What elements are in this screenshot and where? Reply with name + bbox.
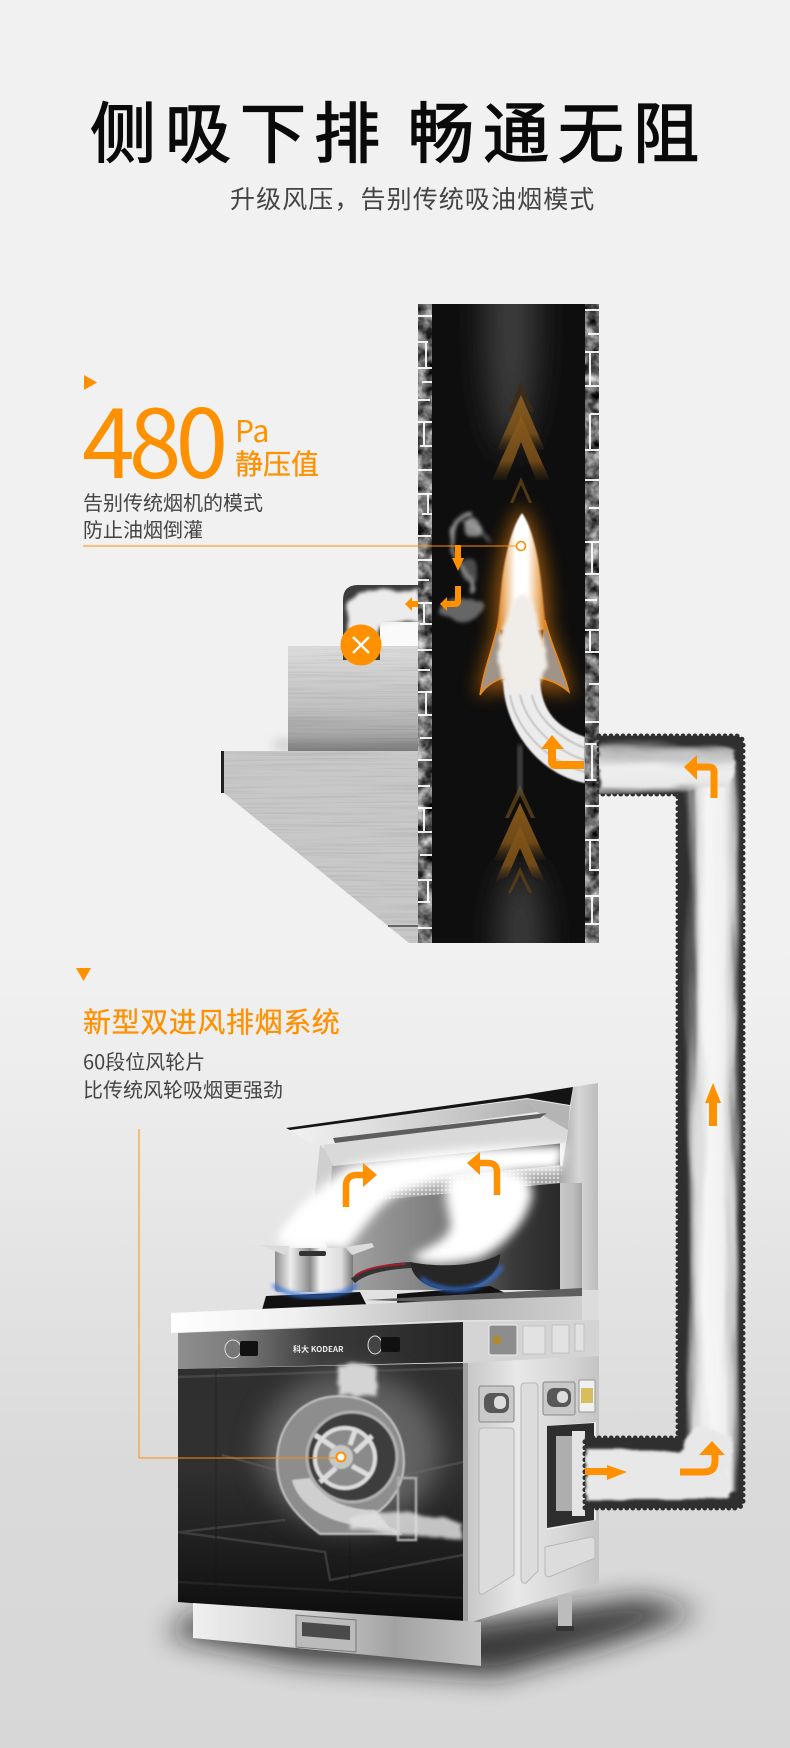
upper hood panel: [290, 1099, 537, 1143]
snail bright band: [292, 1478, 390, 1528]
counter hob plate: [366, 1288, 582, 1303]
side frame: [560, 1083, 598, 1290]
side handle recess left: [479, 1386, 514, 1422]
knob right: [368, 1336, 400, 1354]
label static pressure: 静压值: [235, 443, 319, 483]
fan spokes: [315, 1428, 372, 1482]
arrow: lower duct turn: [680, 1441, 725, 1472]
control panel: [178, 1322, 463, 1369]
small duct with blocked flow: [343, 585, 420, 660]
flame under pot: [273, 1285, 357, 1296]
left pillar: [310, 1145, 333, 1243]
exhaust duct: [585, 736, 745, 1508]
fan inner ring: [315, 1428, 375, 1488]
upper chevrons: [492, 382, 550, 503]
glass soft fan glow: [260, 1372, 440, 1528]
arrow: vertical duct up: [705, 1083, 721, 1126]
cooktop plume smoke: [276, 1145, 565, 1263]
wok handle accent: [355, 1264, 405, 1276]
chimney shaft: [432, 304, 585, 943]
lower hood panel: [323, 1115, 568, 1166]
right brick wall: [585, 304, 599, 943]
hood upper box: [288, 646, 418, 751]
duct box: [398, 1478, 416, 1540]
hood back wall: [325, 1140, 560, 1290]
description line 1: 60段位风轮片: [83, 1046, 205, 1075]
wok handle: [353, 1265, 411, 1281]
duct smoke: [347, 589, 420, 650]
oven smoke out: [350, 1511, 463, 1540]
duct outline: [585, 736, 743, 1508]
door edge strip: [463, 1363, 468, 1625]
pot handles: [260, 1243, 374, 1255]
left grate: [262, 1292, 367, 1310]
cabinet base: [193, 1603, 481, 1666]
duct outer: [343, 585, 418, 660]
hood front edge: [221, 751, 224, 793]
brand text: 科大 KODEAR: [293, 1344, 344, 1355]
icon: down triangle marker: [76, 968, 91, 981]
white gap beneath duct: [380, 622, 418, 646]
subtitle: 升级风压，告别传统吸油烟模式: [230, 180, 595, 216]
glow layers: [485, 190, 543, 1005]
range hood exterior: [221, 646, 418, 943]
big number 480: 480: [82, 369, 224, 506]
lower chevrons: [494, 785, 546, 893]
arrow: smoke down: [452, 545, 464, 571]
rocket glow: [476, 505, 574, 695]
glass door: [178, 1363, 463, 1625]
right grate: [397, 1286, 512, 1304]
counter top: [171, 1296, 582, 1333]
description line 2: 比传统风轮吸烟更强劲: [83, 1074, 283, 1103]
side opening: [547, 1422, 596, 1530]
fan assembly: [277, 1396, 416, 1540]
duct smoke clip group: [586, 742, 745, 1500]
description line 2: 防止油烟倒灌: [83, 514, 203, 543]
hood assembly: [286, 1083, 598, 1290]
arrow: chimney entry: [541, 735, 584, 765]
air slot: [333, 1113, 547, 1143]
arrows: [346, 545, 725, 1480]
faint trail below rocket: [518, 745, 522, 795]
lower frame panel: [560, 1183, 582, 1290]
fan wheel: [307, 1412, 397, 1502]
pot body: [275, 1248, 353, 1292]
right wedge: [527, 1099, 570, 1130]
arrow: hood left burner: [346, 1163, 377, 1207]
leg: [556, 1595, 574, 1631]
side panels: [479, 1383, 595, 1594]
cabinet side panel: [463, 1356, 599, 1625]
panel: 480 Pa callout: [82, 369, 319, 543]
callout line to rocket: [83, 542, 526, 550]
rocket cloud belly: [498, 595, 546, 690]
oven smoke top: [336, 1363, 377, 1396]
unit Pa: Pa: [235, 407, 269, 451]
hood slot line: [388, 925, 418, 927]
shaft interior: [432, 304, 585, 943]
counter right edge: [582, 1290, 599, 1323]
black glass top: [286, 1087, 573, 1130]
wok body: [410, 1254, 500, 1290]
duct smoke upper horizontal: [599, 742, 736, 794]
glass reflections: [178, 1368, 463, 1598]
description line 1: 告别传统烟机的模式: [83, 487, 263, 516]
arrow: upper duct turn: [684, 755, 714, 798]
integrated stove: [171, 1083, 599, 1666]
hood shadow: [272, 738, 296, 752]
callout line to fan: [139, 1129, 346, 1462]
perforated band: [373, 1165, 563, 1200]
pot label: [299, 1251, 326, 1256]
blocked icon: [340, 624, 382, 666]
duct smoke vertical: [683, 760, 742, 1496]
rocket fins: [480, 620, 569, 695]
arrow: duct left: [405, 597, 418, 611]
section heading: 新型双进风排烟系统: [83, 1001, 340, 1041]
panel: dual intake system: [76, 968, 340, 1103]
side handle recess right: [543, 1382, 575, 1415]
icon: right triangle marker: [84, 375, 97, 390]
data plate: [579, 1380, 595, 1412]
rocket flame tail: [503, 680, 585, 783]
fan hub: [329, 1445, 353, 1469]
arrow: smoke turn left: [440, 586, 458, 611]
ground shadow: [165, 1598, 700, 1676]
duct smoke lower horizontal: [586, 1425, 732, 1500]
gas valve: [489, 1325, 517, 1355]
side upper tiles: [523, 1324, 584, 1354]
rocket body: [497, 513, 546, 630]
arrow: exit right: [585, 1465, 627, 1480]
title: 侧吸下排畅通无阻: [90, 81, 699, 177]
side upper strip: [463, 1320, 599, 1363]
flame under wok: [421, 1266, 502, 1290]
base handle: [296, 1615, 356, 1652]
fan housing: [277, 1396, 404, 1534]
arrow: hood right burner: [467, 1152, 497, 1195]
hood lower body: [224, 751, 418, 943]
curling smoke in shaft: [440, 515, 490, 622]
left brick wall: [418, 304, 432, 943]
burners and pans: [260, 1243, 582, 1310]
knob left: [225, 1340, 258, 1358]
